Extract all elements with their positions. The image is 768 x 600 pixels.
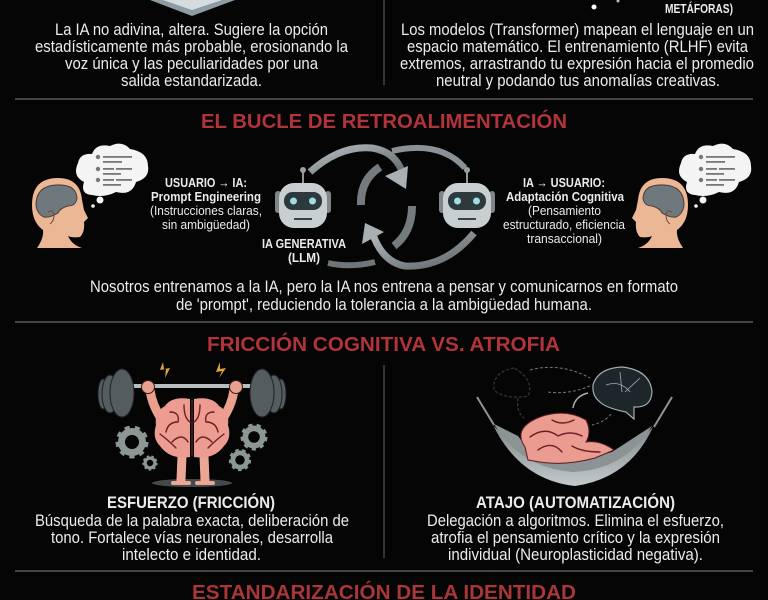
text: AI to user: (Pensamiento (528, 203, 601, 218)
text: predictive explanation: estadísticamente más probable, erosionando la (35, 38, 349, 56)
icon: embedding sparkles (592, 0, 620, 10)
text: shortcut (427, 493, 724, 564)
icon: right head (632, 178, 688, 248)
icon: left head (32, 178, 88, 248)
text: predictive explanation: salida estandarizada. (121, 72, 262, 90)
text: AI to user (503, 175, 626, 246)
label: metáforas: METÁFORAS) (665, 1, 733, 16)
label: generative AI: IA GENERATIVA (262, 236, 347, 251)
icon: right thought cloud (679, 144, 751, 208)
icon: circular arrows (310, 148, 474, 266)
text: user to AI: USUARIO → IA: (165, 175, 247, 190)
text: effort: intelecto e identidad. (122, 546, 261, 564)
text: AI to user: transaccional) (527, 231, 602, 246)
text: model explanation (400, 21, 754, 90)
text: effort: ESFUERZO (FRICCIÓN) (107, 493, 275, 512)
illustration: brain resting in hammock (477, 367, 672, 486)
icon: left robot (275, 167, 331, 228)
text: effort: Búsqueda de la palabra exacta, deliberación de (35, 512, 349, 530)
text: user to AI: sin ambigüedad) (162, 217, 250, 232)
label: generative AI: (LLM) (288, 250, 320, 265)
text: predictive explanation (35, 21, 349, 90)
text: effort: tono. Fortalece vías neuronales, desarrolla (51, 529, 334, 547)
text: predictive explanation: voz única y las peculiaridades por una (65, 55, 319, 73)
text: user to AI: (Instrucciones claras, (150, 203, 262, 218)
label: generative AI (262, 236, 347, 265)
icon: stacked layers bottom (150, 0, 235, 16)
text: AI to user: Adaptación Cognitiva (506, 189, 625, 204)
icon: right robot (439, 167, 495, 228)
text: shortcut: individual (Neuroplasticidad negativa). (448, 546, 703, 564)
text: shortcut: ATAJO (AUTOMATIZACIÓN) (476, 493, 675, 512)
text: AI to user: IA → USUARIO: (523, 175, 605, 190)
text: feedback loop conclusion: de 'prompt', reduciendo la tolerancia a la ambigüedad humana. (176, 296, 592, 314)
text: shortcut: atrofia el pensamiento crítico y la expresión (431, 529, 720, 547)
text: model explanation: neutral y podando tus anomalías creativas. (436, 72, 720, 90)
text: user to AI: Prompt Engineering (151, 189, 261, 204)
text: shortcut: Delegación a algoritmos. Elimina el esfuerzo, (427, 512, 724, 530)
text: AI to user: estructurado, eficiencia (503, 217, 626, 232)
illustration: brain lifting barbell (98, 362, 286, 487)
heading: feedback loop: EL BUCLE DE RETROALIMENTACIÓN (201, 109, 567, 133)
heading: cognitive friction: FRICCIÓN COGNITIVA VS. ATROFIA (207, 332, 560, 356)
icon: left thought cloud (76, 144, 148, 208)
text: feedback loop conclusion (90, 278, 678, 314)
text: feedback loop conclusion: Nosotros entrenamos a la IA, pero la IA nos entrena a pensar y comunicarnos en formato (90, 278, 678, 296)
panel: feedback loop diagram (32, 144, 751, 266)
text: predictive explanation: La IA no adivina, altera. Sugiere la opción (55, 21, 328, 39)
text: effort (35, 493, 349, 564)
text: user to AI (150, 175, 262, 232)
